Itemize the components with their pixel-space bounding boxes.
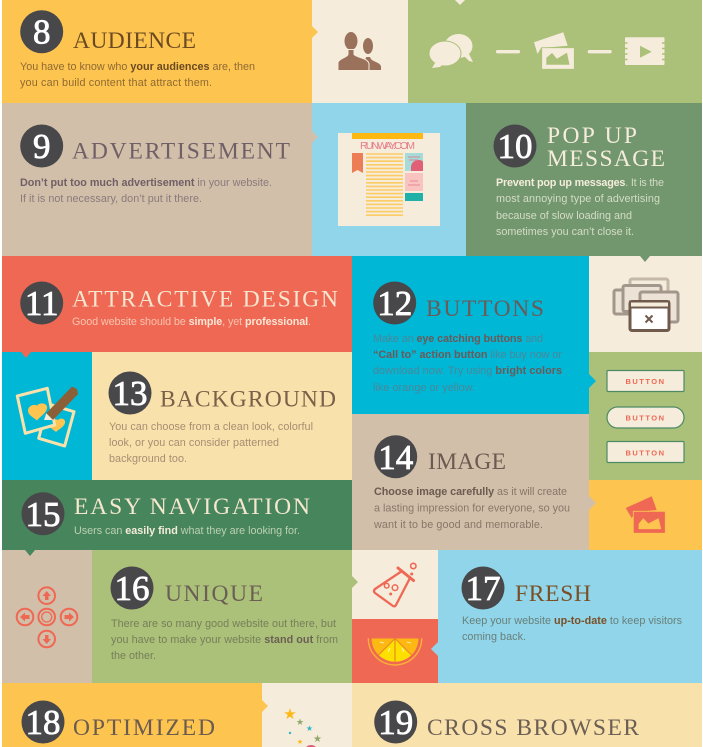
panel: optimized: OPTIMIZED bbox=[73, 715, 215, 741]
panel: background: BACKGROUND bbox=[160, 387, 336, 413]
panel: fresh: 17 bbox=[466, 569, 500, 608]
panel: unique: the other. bbox=[111, 650, 156, 662]
panel: stars icon bbox=[262, 683, 352, 747]
panel: pop up message: sometimes you can’t close it. bbox=[496, 226, 634, 238]
panel: pop up message: 10 bbox=[498, 127, 532, 166]
panel: website mockup: RUNWAY.COM bbox=[360, 140, 415, 152]
panel: pop up message: MESSAGE bbox=[547, 146, 665, 172]
panel: unique: UNIQUE bbox=[165, 581, 263, 607]
panel: stars icon: ★ bbox=[297, 738, 303, 746]
panel: pop up message: Prevent pop up messages. It is the bbox=[496, 177, 664, 189]
panel: buttons bbox=[352, 256, 589, 414]
panel: unique bbox=[92, 550, 352, 683]
panel: flask icon bbox=[352, 550, 438, 619]
panel: pop up message: because of slow loading and bbox=[496, 210, 632, 222]
panel: pop up message bbox=[466, 103, 702, 256]
panel: attractive design bbox=[2, 256, 352, 352]
panel: background bbox=[92, 352, 352, 480]
panel: audience icon bbox=[312, 0, 408, 103]
panel: unique: There are so many good website out there, but bbox=[111, 618, 336, 630]
panel: easy navigation bbox=[2, 480, 352, 550]
panel: audience bbox=[2, 0, 312, 103]
divider dash bbox=[588, 50, 612, 53]
panel: advertisement bbox=[2, 103, 312, 256]
panel: stars icon: ★ bbox=[313, 734, 322, 745]
panel: button samples: BUTTON bbox=[625, 377, 666, 386]
panel: buttons: BUTTONS bbox=[426, 296, 544, 322]
divider dash bbox=[496, 50, 520, 53]
panel: image icon bbox=[589, 480, 702, 550]
panel: cross browser: CROSS BROWSER bbox=[427, 715, 639, 741]
panel: easy navigation: EASY NAVIGATION bbox=[74, 494, 310, 520]
panel: optimized: 18 bbox=[26, 703, 60, 742]
panel: easy navigation: 15 bbox=[26, 495, 60, 534]
panel: cross browser: 19 bbox=[378, 703, 413, 742]
panel: background icon bbox=[2, 352, 92, 480]
panel: unique: 16 bbox=[114, 569, 150, 608]
panel: advertisement: ADVERTISEMENT bbox=[72, 139, 290, 165]
panel: attractive design: 11 bbox=[25, 284, 59, 323]
icon: photos bbox=[534, 32, 574, 69]
panel: unique: you have to make your website stand out from bbox=[111, 634, 338, 646]
icon: video film strip bbox=[625, 37, 664, 65]
panel: image: 14 bbox=[378, 438, 413, 477]
panel: pop up message: most annoying type of advertising bbox=[496, 193, 660, 205]
panel: fresh: FRESH bbox=[515, 581, 591, 607]
panel: audience: you can build content that attract them. bbox=[20, 77, 212, 89]
panel: button samples bbox=[589, 352, 702, 480]
panel: button samples: BUTTON bbox=[625, 448, 666, 458]
panel: buttons: Make an eye catching buttons and bbox=[373, 333, 543, 345]
panel: background: look, or you can consider patterned bbox=[109, 437, 279, 449]
panel: website mockup bbox=[312, 103, 466, 256]
panel: image: a lasting impression for everyone, so you bbox=[374, 502, 570, 514]
panel: attractive design: Good website should be simple, yet professional. bbox=[72, 316, 311, 328]
panel: fresh: coming back. bbox=[462, 631, 526, 643]
panel: audience: You have to know who your audiences are, then bbox=[20, 61, 255, 73]
panel: pop up message: POP UP bbox=[547, 123, 637, 149]
panel: orange icon bbox=[352, 619, 438, 683]
panel: content type icons bbox=[408, 0, 702, 103]
panel: cross browser bbox=[352, 683, 702, 747]
panel: fresh bbox=[431, 550, 702, 683]
panel: buttons: “Call to” action button like buy now or bbox=[373, 349, 562, 361]
panel: image bbox=[352, 414, 589, 550]
panel: stars icon: ★ bbox=[306, 724, 313, 733]
panel: attractive design: ATTRACTIVE DESIGN bbox=[72, 287, 338, 313]
panel: optimized bbox=[2, 683, 262, 747]
icon: speech bubbles bbox=[429, 34, 473, 68]
panel: image: want it to be good and memorable. bbox=[373, 519, 543, 531]
panel: image: IMAGE bbox=[428, 449, 506, 475]
panel: stars icon: ★ bbox=[296, 718, 304, 728]
panel: buttons: download now. Try using bright colors bbox=[373, 365, 562, 377]
panel: fresh: Keep your website up-to-date to keep visitors bbox=[462, 615, 683, 627]
panel: background: You can choose from a clean look, colorful bbox=[109, 421, 313, 433]
panel: audience: AUDIENCE bbox=[73, 28, 196, 54]
panel: button samples: BUTTON bbox=[625, 414, 666, 422]
panel: stars icon: ★ bbox=[283, 705, 297, 723]
panel: advertisement: If it is not necessary, don’t put it there. bbox=[20, 193, 202, 205]
panel: easy navigation: Users can easily find what they are looking for. bbox=[74, 525, 300, 537]
panel: navigation icon bbox=[2, 550, 92, 683]
panel: advertisement: Don’t put too much advertisement in your website. bbox=[20, 177, 272, 189]
panel: audience: 8 bbox=[33, 12, 50, 52]
panel: background: 13 bbox=[112, 374, 148, 413]
panel: popup windows icon bbox=[589, 256, 702, 352]
panel: background: background too. bbox=[109, 453, 187, 465]
panel: advertisement: 9 bbox=[33, 127, 50, 166]
panel: buttons: like orange or yellow. bbox=[373, 382, 475, 394]
panel: image: Choose image carefully as it will create bbox=[374, 486, 567, 498]
panel: buttons: 12 bbox=[377, 284, 412, 323]
